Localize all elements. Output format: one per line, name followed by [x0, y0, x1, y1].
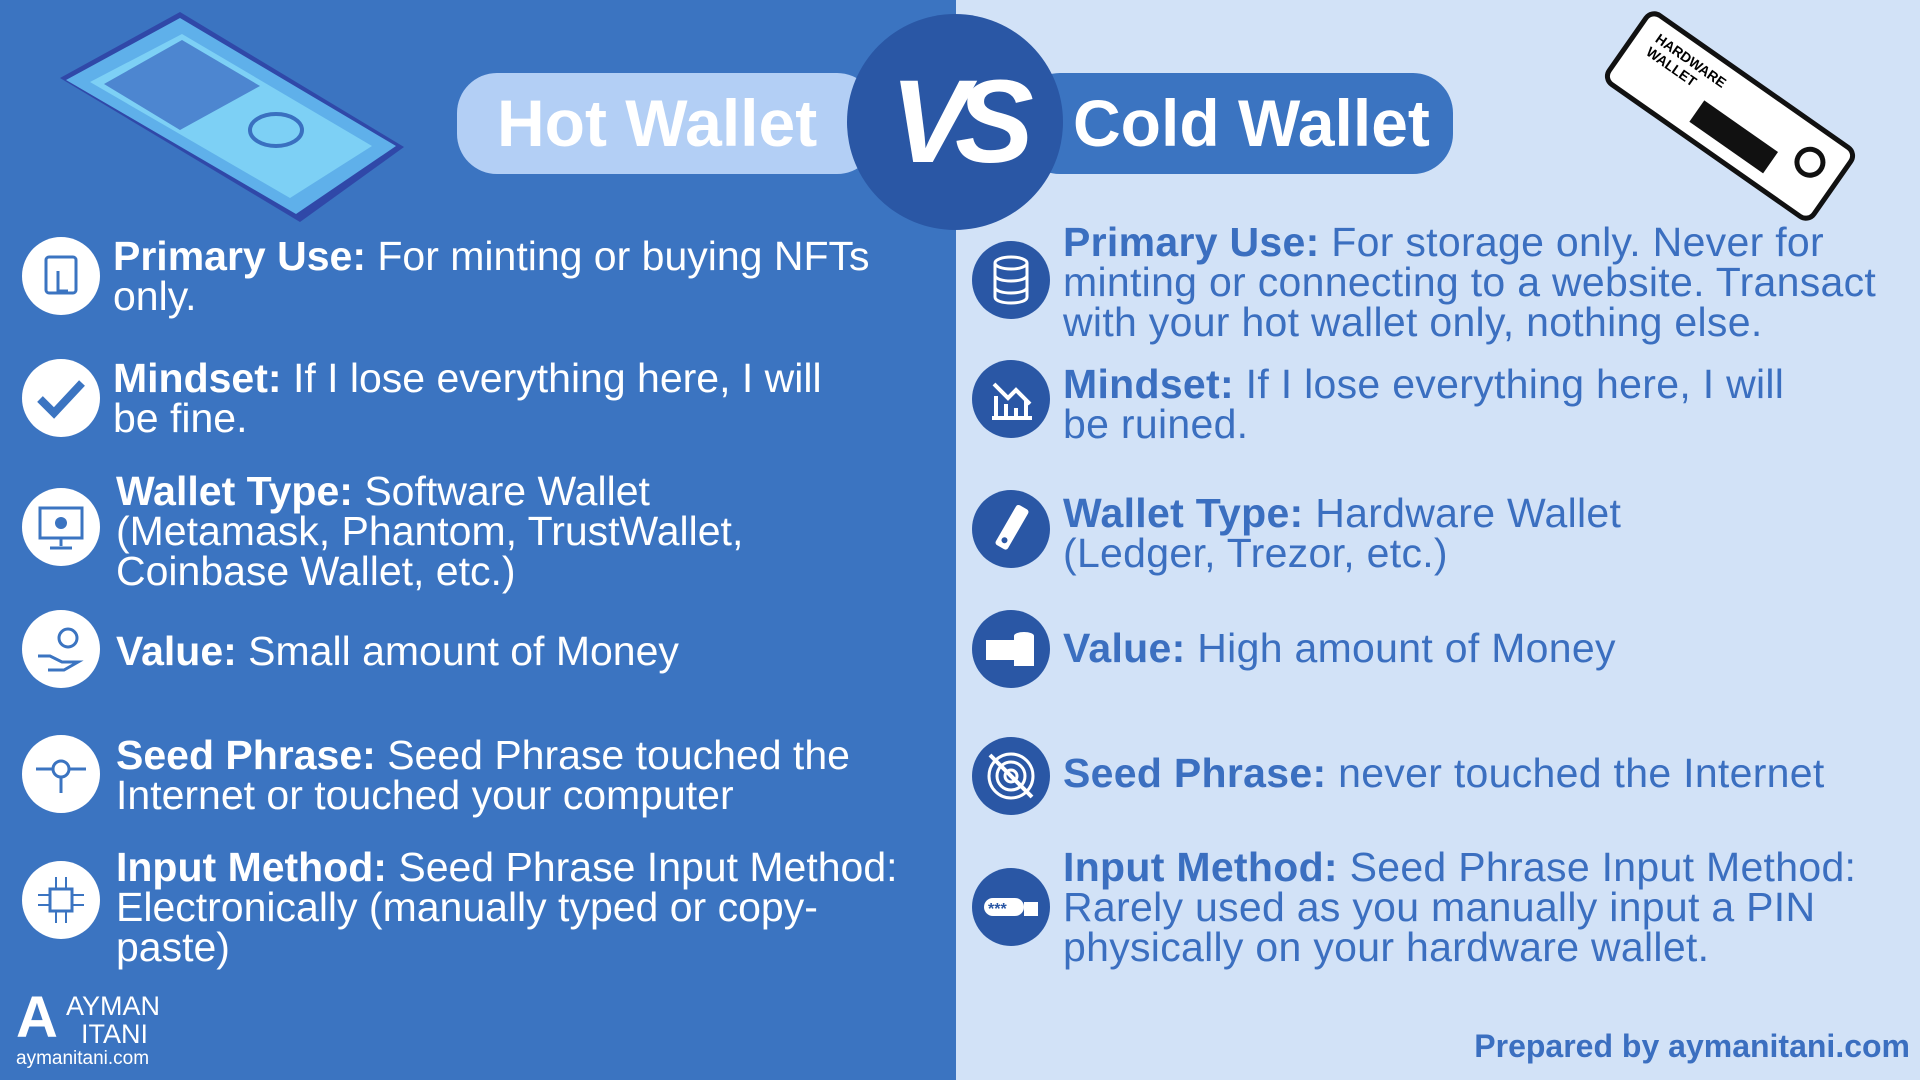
- text: input method hot: Input Method: Seed Phrase Input Method:: [116, 844, 898, 890]
- VS badge: VS: [890, 56, 1020, 188]
- icon: wallet type cold: [972, 490, 1050, 568]
- text: mindset cold: [1063, 361, 1784, 447]
- text: mindset hot: Mindset: If I lose everything here, I will: [113, 355, 822, 401]
- text: wallet type hot: (Metamask, Phantom, TrustWallet,: [116, 508, 743, 554]
- hot wallet title pill: Hot Wallet: [497, 86, 817, 160]
- icon: seed phrase hot: [22, 735, 100, 813]
- logo: Ayman Itani: A: [16, 985, 58, 1050]
- text: mindset cold: be ruined.: [1063, 401, 1248, 447]
- text: input method cold: Input Method: Seed Phrase Input Method:: [1063, 844, 1856, 890]
- logo: Ayman Itani: [16, 985, 160, 1069]
- footer credit: Prepared by aymanitani.com: [1474, 1028, 1910, 1064]
- text: primary use hot: only.: [113, 273, 197, 319]
- icon: primary use hot: [22, 237, 100, 315]
- text: primary use cold: [1063, 219, 1876, 345]
- icon: hardware wallet illustration: HARDWARE: [1653, 30, 1729, 91]
- VS badge: [847, 14, 1063, 230]
- text: input method cold: [1063, 844, 1856, 970]
- text: wallet type cold: [1063, 490, 1621, 576]
- icon: mindset cold: [972, 360, 1050, 438]
- icon: smartphone illustration: [60, 12, 404, 222]
- text: input method hot: [116, 844, 898, 970]
- icon: input method hot: [22, 861, 100, 939]
- text: input method cold: Rarely used as you manually input a PIN: [1063, 884, 1815, 930]
- icon: primary use cold: [972, 241, 1050, 319]
- icon: hardware wallet illustration: WALLET: [1643, 43, 1700, 90]
- text: primary use hot: Primary Use: For minting or buying NFTs: [113, 233, 870, 279]
- text: input method hot: Electronically (manually typed or copy-: [116, 884, 818, 930]
- icon: mindset hot: [22, 359, 100, 437]
- text: wallet type hot: Wallet Type: Software Wallet: [116, 468, 650, 514]
- text: primary use cold: Primary Use: For storage only. Never for: [1063, 219, 1824, 265]
- text: primary use cold: with your hot wallet only, nothing else.: [1063, 299, 1763, 345]
- text: mindset hot: be fine.: [113, 395, 248, 441]
- text: wallet type hot: Coinbase Wallet, etc.): [116, 548, 516, 594]
- cold wallet title pill: [1020, 73, 1453, 174]
- text: mindset cold: Mindset: If I lose everything here, I will: [1063, 361, 1784, 407]
- text: primary use cold: minting or connecting to a website. Transact: [1063, 259, 1876, 305]
- text: input method hot: paste): [116, 924, 230, 970]
- text: wallet type hot: [116, 468, 743, 594]
- text: mindset hot: [113, 355, 822, 441]
- text: seed phrase hot: Seed Phrase: Seed Phrase touched the: [116, 732, 850, 778]
- text: value hot: Value: Small amount of Money: [116, 628, 679, 674]
- icon: value cold: [972, 610, 1050, 688]
- text: wallet type cold: (Ledger, Trezor, etc.): [1063, 530, 1448, 576]
- text: wallet type cold: Wallet Type: Hardware Wallet: [1063, 490, 1621, 536]
- icon: value hot: [22, 610, 100, 688]
- icon: hardware wallet illustration: [1604, 11, 1856, 221]
- logo: Ayman Itani: ITANI: [81, 1019, 148, 1049]
- icon: wallet type hot: [22, 488, 100, 566]
- icon: input method cold: ***: [988, 901, 1007, 918]
- hot wallet title pill: [457, 73, 877, 174]
- logo: Ayman Itani: AYMAN: [66, 991, 160, 1021]
- text: seed phrase hot: Internet or touched your computer: [116, 772, 734, 818]
- text: primary use hot: [113, 233, 870, 319]
- text: input method cold: physically on your hardware wallet.: [1063, 924, 1709, 970]
- text: value cold: Value: High amount of Money: [1063, 625, 1616, 671]
- icon: seed phrase cold: [972, 737, 1050, 815]
- logo: Ayman Itani: aymanitani.com: [16, 1048, 149, 1069]
- text: seed phrase cold: Seed Phrase: never touched the Internet: [1063, 750, 1825, 796]
- icon: input method cold: [972, 868, 1050, 946]
- cold wallet title pill: Cold Wallet: [1073, 86, 1430, 160]
- text: seed phrase hot: [116, 732, 850, 818]
